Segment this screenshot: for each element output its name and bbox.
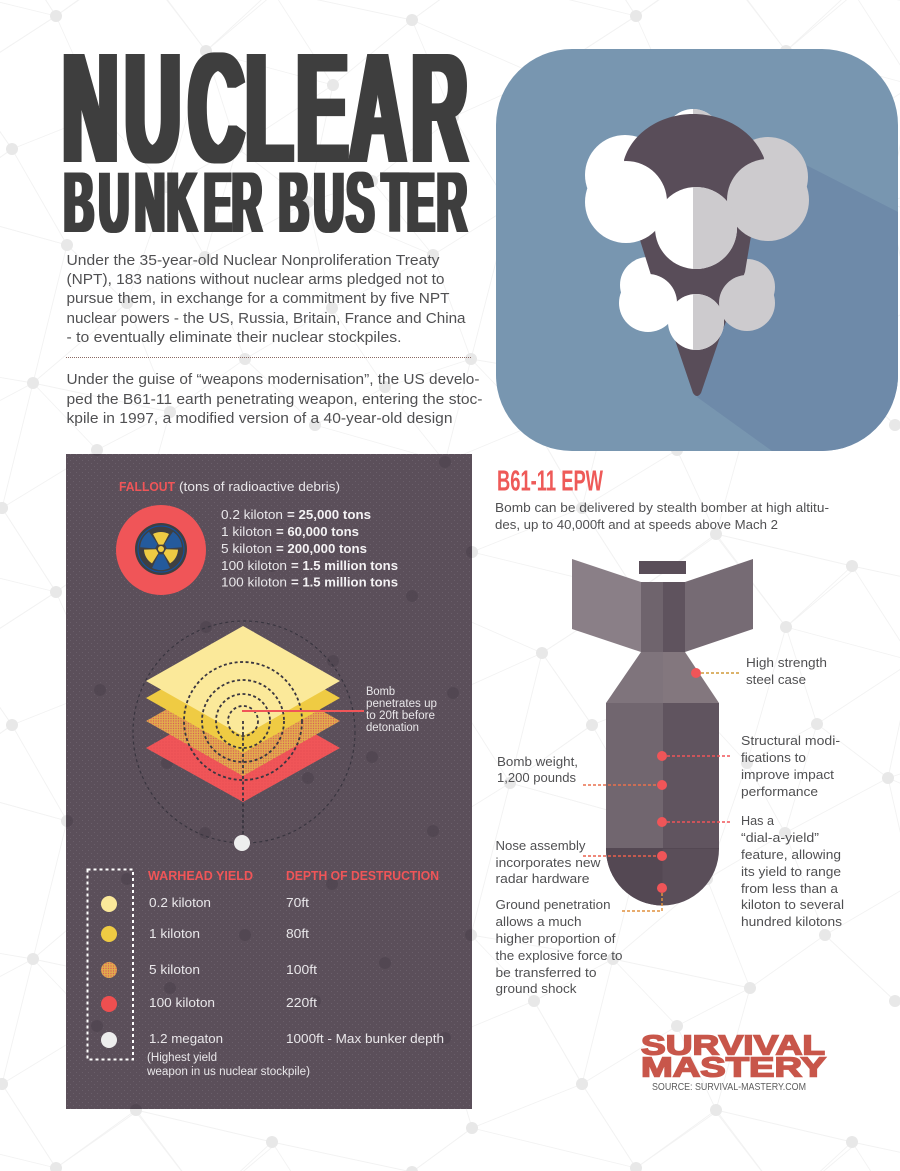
icon: radiation symbol xyxy=(116,505,206,595)
fallout list: 5 kiloton xyxy=(221,541,272,556)
label: ground penetration: higher proportion of xyxy=(496,931,616,946)
callout: bomb penetration: Bomb xyxy=(366,686,395,698)
yield table xyxy=(146,868,444,1078)
fallout list: 100 kiloton xyxy=(221,574,287,590)
label: steel case xyxy=(746,655,827,687)
label: steel case: High strength xyxy=(746,655,827,670)
callout: bomb penetration: to 20ft before xyxy=(366,710,435,722)
logo: Survival Mastery: SOURCE: SURVIVAL-MASTERY.COM xyxy=(652,1081,806,1093)
label: structural modifications: performance xyxy=(741,784,818,799)
logo: Survival Mastery: SURVIVAL xyxy=(641,1030,825,1060)
heading: B61-11 EPW: Bomb can be delivered by stealth bomber at high altitu- xyxy=(495,500,829,515)
yield table: 70ft xyxy=(286,895,309,910)
heading: B61-11 EPW: B61-11 EPW xyxy=(497,466,603,498)
label: ground penetration: the explosive force to xyxy=(496,948,622,963)
label: dial-a-yield: hundred kilotons xyxy=(741,914,843,929)
chart: layered blast depth diagram xyxy=(133,621,364,851)
intro text: pursue them, in exchange for a commitment by five NPT xyxy=(66,290,450,307)
callout: bomb penetration: detonation xyxy=(366,722,419,734)
intro text: Under the guise of “weapons modernisation”, the US develo- xyxy=(66,371,480,388)
yield table: (Highest yield xyxy=(147,1052,217,1064)
yield table: weapon in us nuclear stockpile) xyxy=(146,1066,310,1078)
yield table: 5 kiloton xyxy=(149,962,200,977)
fallout list: = 60,000 tons xyxy=(276,524,359,539)
label: dial-a-yield: from less than a xyxy=(741,881,839,896)
label: nose assembly xyxy=(496,838,601,886)
label: bomb weight xyxy=(497,754,578,785)
fallout list: 1 kiloton xyxy=(221,524,272,539)
legend key xyxy=(88,870,133,1060)
fallout heading: (tons of radioactive debris) xyxy=(179,479,340,494)
label: dial-a-yield: feature, allowing xyxy=(741,847,841,862)
label: dial-a-yield: its yield to range xyxy=(741,864,841,879)
yield table: 100 kiloton xyxy=(149,995,215,1010)
label: ground penetration xyxy=(496,897,622,996)
fallout list: 100 kiloton xyxy=(221,558,287,573)
label: ground penetration: Ground penetration xyxy=(496,897,610,912)
fallout list: = 1.5 million tons xyxy=(291,574,398,590)
fallout list: = 25,000 tons xyxy=(287,507,371,522)
label: ground penetration: ground shock xyxy=(496,981,577,996)
intro text: kpile in 1997, a modified version of a 40-year-old design xyxy=(66,410,452,427)
yield table: 1 kiloton xyxy=(149,926,200,941)
intro text: ped the B61-11 earth penetrating weapon, entering the stoc- xyxy=(66,391,483,408)
title: BUNKER BUSTER xyxy=(64,156,467,251)
fallout list xyxy=(221,507,398,590)
intro text: - to eventually eliminate their nuclear stockpiles. xyxy=(66,329,402,346)
label: dial-a-yield xyxy=(741,813,844,929)
label: nose assembly: radar hardware xyxy=(496,871,590,886)
callout markers on the bomb xyxy=(583,668,740,911)
label: steel case: steel case xyxy=(746,672,806,687)
fallout list: 0.2 kiloton xyxy=(221,507,283,522)
label: ground penetration: allows a much xyxy=(496,914,582,929)
yield table: 1.2 megaton xyxy=(149,1031,223,1046)
intro text: nuclear powers - the US, Russia, Britain, France and China xyxy=(66,310,466,327)
callout: bomb penetration: penetrates up xyxy=(366,698,437,710)
yield table: 1000ft - Max bunker depth xyxy=(286,1031,444,1046)
label: structural modifications xyxy=(741,733,840,799)
heading: B61-11 EPW xyxy=(495,466,829,532)
logo: Survival Mastery xyxy=(641,1030,826,1093)
intro text xyxy=(66,252,483,427)
yield table: 100ft xyxy=(286,962,317,977)
label: nose assembly: Nose assembly xyxy=(496,838,586,853)
fallout heading xyxy=(119,479,340,494)
label: ground penetration: be transferred to xyxy=(496,965,596,980)
fallout heading: FALLOUT xyxy=(119,479,175,494)
bomb illustration xyxy=(572,559,753,906)
label: structural modifications: improve impact xyxy=(741,767,834,782)
intro text: Under the 35-year-old Nuclear Nonproliferation Treaty xyxy=(66,252,440,269)
yield table: 80ft xyxy=(286,926,309,941)
intro text: (NPT), 183 nations without nuclear arms pledged not to xyxy=(66,271,444,288)
label: dial-a-yield: kiloton to several xyxy=(741,897,844,912)
yield table: 0.2 kiloton xyxy=(149,895,211,910)
panel: fallout and warhead yield xyxy=(66,454,472,1109)
label: structural modifications: fications to xyxy=(741,750,806,765)
yield table: 220ft xyxy=(286,995,317,1010)
fallout list: = 1.5 million tons xyxy=(291,558,398,573)
label: structural modifications: Structural modi- xyxy=(741,733,840,748)
yield table: DEPTH OF DESTRUCTION xyxy=(286,868,439,883)
label: bomb weight: 1,200 pounds xyxy=(497,770,576,785)
label: dial-a-yield: Has a xyxy=(741,813,775,828)
yield table: WARHEAD YIELD xyxy=(148,868,253,883)
label: bomb weight: Bomb weight, xyxy=(497,754,578,769)
logo: Survival Mastery: MASTERY xyxy=(641,1052,826,1082)
label: nose assembly: incorporates new xyxy=(496,855,601,870)
callout: bomb penetration xyxy=(366,686,437,734)
fallout list: = 200,000 tons xyxy=(276,541,367,556)
title: NUCLEAR xyxy=(63,21,467,196)
heading: B61-11 EPW: des, up to 40,000ft and at speeds above Mach 2 xyxy=(495,517,778,532)
label: dial-a-yield: “dial-a-yield” xyxy=(741,830,819,845)
panel: mushroom cloud icon xyxy=(496,49,898,451)
